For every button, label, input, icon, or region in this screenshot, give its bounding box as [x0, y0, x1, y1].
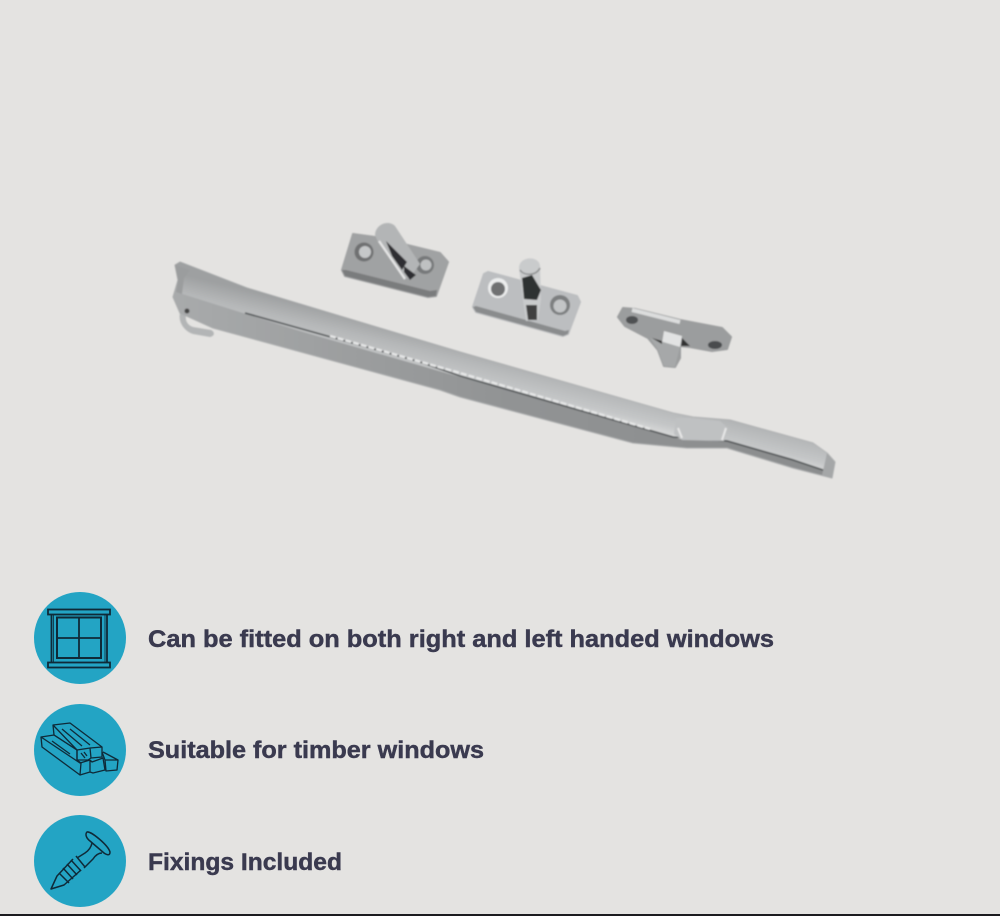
icon: screw: [34, 815, 126, 907]
product: window stay arm: [173, 262, 835, 478]
bottom rule: [0, 914, 1000, 916]
product: angled keep plate: [342, 223, 448, 297]
text: timber: Suitable for timber windows: [148, 737, 484, 764]
feature: timber: [34, 704, 484, 796]
feature: handed windows: [34, 592, 774, 684]
text: handed windows: Can be fitted on both right and left handed windows: [148, 626, 774, 653]
product: upright keep plate: [473, 258, 580, 336]
product: hook keep: [618, 308, 731, 367]
icon: timber stack: [34, 704, 126, 796]
text: fixings: Fixings Included: [148, 849, 342, 876]
icon: window: [34, 592, 126, 684]
feature: fixings: [34, 815, 342, 907]
